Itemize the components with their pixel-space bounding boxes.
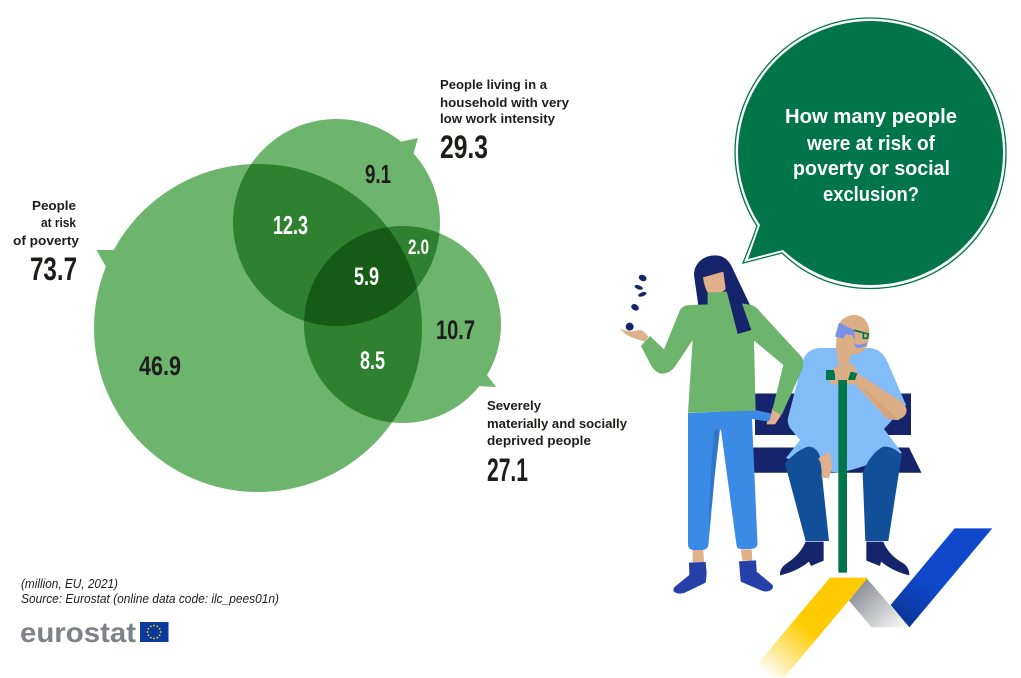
decorative ribbon — [747, 528, 992, 677]
bubble text — [785, 106, 957, 206]
woman ankles — [693, 549, 752, 562]
venn value: 9.1: 9.1 — [365, 159, 391, 189]
bubble text: poverty or social — [793, 158, 950, 180]
circle: very low work intensity — [233, 119, 440, 326]
woman hands — [619, 328, 781, 424]
circle: people at risk of poverty — [94, 164, 422, 492]
label: severely materially and socially deprived people: 27.1 — [487, 452, 528, 488]
venn value: 10.7: 10.7 — [436, 315, 475, 345]
source note: (million, EU, 2021) — [21, 577, 118, 591]
venn value: 5.9: 5.9 — [354, 263, 379, 291]
illustration: standing woman — [619, 255, 803, 594]
bench — [752, 394, 922, 473]
label: very low work intensity: household with very — [440, 95, 570, 110]
source note: Source: Eurostat (online data code: ilc_pees01n) — [21, 592, 279, 606]
woman legs and trousers — [688, 410, 774, 550]
venn value: 12.3: 12.3 — [273, 210, 308, 240]
label: severely materially and socially deprived people: Severely — [487, 398, 542, 413]
illustration: seated man — [780, 315, 909, 575]
label: people at risk of poverty: People — [32, 198, 76, 213]
venn value: 46.9: 46.9 — [139, 351, 181, 381]
trouser shadow — [708, 429, 720, 530]
venn value: 8.5: 8.5 — [360, 347, 385, 375]
ribbon: yellow — [747, 578, 868, 677]
EU flag — [140, 622, 168, 642]
bubble text: were at risk of — [806, 133, 935, 155]
label: very low work intensity: People living in a — [440, 77, 548, 92]
label: severely materially and socially deprived people — [487, 398, 628, 488]
speech bubble — [735, 18, 1006, 288]
label: people at risk of poverty: at risk — [41, 215, 77, 230]
woman face — [703, 272, 726, 293]
eurostat logo: eurostat — [20, 617, 136, 648]
label: very low work intensity: 29.3 — [440, 129, 488, 165]
label: people at risk of poverty: of poverty — [13, 233, 80, 248]
label: very low work intensity: low work intensity — [440, 111, 556, 126]
venn diagram — [94, 119, 501, 492]
bubble text: How many people — [785, 106, 957, 128]
man shirt — [786, 348, 906, 473]
man head, arm and cane — [826, 315, 907, 573]
venn value: 2.0: 2.0 — [408, 236, 429, 259]
man hand on knee — [818, 452, 832, 478]
coins falling — [626, 274, 648, 331]
ribbon: grey — [849, 578, 909, 627]
label: very low work intensity — [440, 77, 570, 165]
woman sweater — [641, 292, 803, 415]
label: severely materially and socially deprived people: materially and socially — [487, 416, 628, 431]
label: people at risk of poverty — [13, 198, 80, 287]
circle: severely materially and socially deprived — [304, 226, 501, 423]
ribbon: blue — [891, 528, 992, 627]
source note — [21, 577, 279, 606]
woman shoes — [673, 560, 773, 594]
man shoes — [780, 542, 909, 575]
bubble text: exclusion? — [823, 184, 919, 206]
woman back hair — [694, 255, 750, 306]
woman front hair — [728, 297, 751, 334]
label: severely materially and socially deprived people: deprived people — [487, 433, 591, 448]
man legs — [785, 447, 902, 541]
label: people at risk of poverty: 73.7 — [30, 251, 77, 287]
